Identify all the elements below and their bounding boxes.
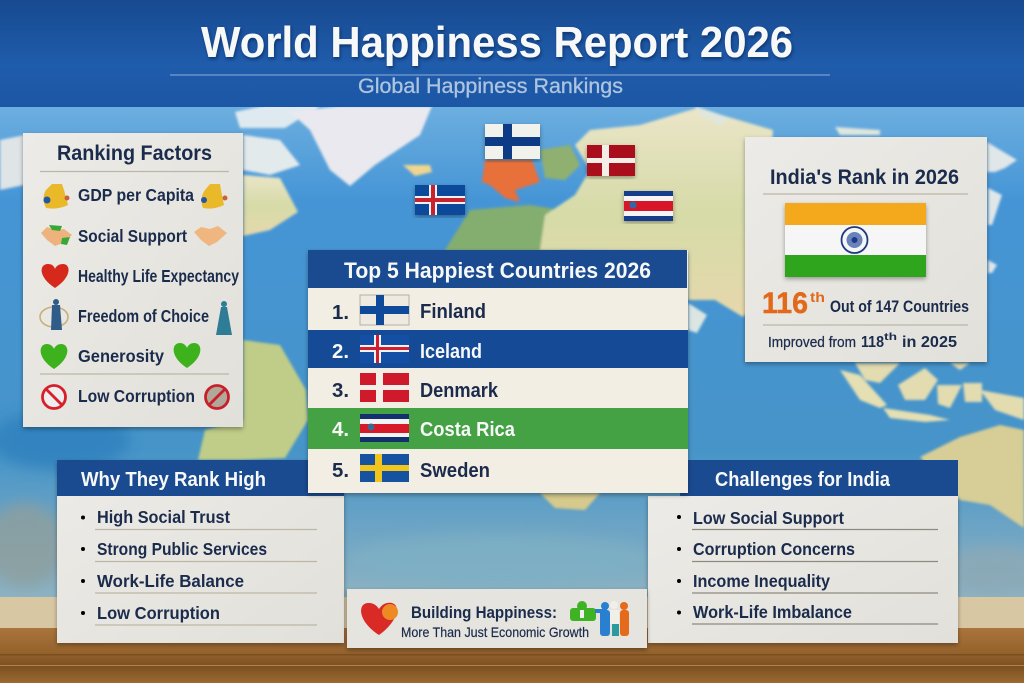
factor: GDP per Capita: GDP per Capita xyxy=(78,185,194,205)
panel: challenges for India xyxy=(648,460,958,643)
improvement note: Improved from xyxy=(768,334,856,351)
heading: challenges for India: Challenges for India xyxy=(715,469,891,491)
header band xyxy=(0,0,1024,107)
world map background xyxy=(0,100,1024,600)
callout text: Building Happiness: xyxy=(411,603,557,622)
heading: ranking factors: Ranking Factors xyxy=(57,142,212,165)
panel: why they rank high xyxy=(57,460,344,643)
list: challenges: Low Social Support xyxy=(693,508,844,528)
panel: India's rank xyxy=(745,137,987,362)
row 3: Denmark xyxy=(308,369,688,408)
row 4: Costa Rica: Costa Rica xyxy=(420,419,516,441)
row 5: Sweden: Sweden xyxy=(420,460,490,482)
row 1: Finland: Finland xyxy=(420,301,486,323)
map flag: Denmark xyxy=(587,145,635,176)
India flag xyxy=(785,203,926,277)
heading: why they rank high: Why They Rank High xyxy=(81,469,266,491)
icon: heart xyxy=(361,603,398,635)
panel: building happiness callout xyxy=(347,589,647,648)
factor: Generosity xyxy=(41,343,200,369)
list: challenges: Corruption Concerns xyxy=(693,539,855,559)
factor: Freedom of Choice xyxy=(40,299,232,335)
improvement note: 118 xyxy=(861,334,884,351)
India rank 116th xyxy=(762,287,969,320)
row 4: Costa Rica: 4. xyxy=(332,419,349,441)
title: World Happiness Report 2026 xyxy=(201,18,793,67)
row 2: Iceland: 2. xyxy=(332,341,349,363)
factor: GDP per Capita xyxy=(44,184,228,209)
list: challenges: Income Inequality xyxy=(693,571,830,591)
list: challenges xyxy=(677,508,938,624)
map flag: Costa Rica xyxy=(624,191,673,221)
factor: Freedom of Choice: Freedom of Choice xyxy=(78,306,209,326)
list: reasons: Work-Life Balance xyxy=(97,571,244,591)
factor: Low Corruption xyxy=(42,386,228,408)
improvement note: th xyxy=(884,332,897,343)
row 2: Iceland xyxy=(308,330,688,368)
callout text xyxy=(401,603,589,640)
row 1: Finland xyxy=(308,289,688,329)
row 1: Finland: 1. xyxy=(332,302,349,324)
panel: top 5 happiest countries xyxy=(308,250,688,493)
row 5: Sweden: 5. xyxy=(332,460,349,482)
factor: Social Support xyxy=(41,225,227,246)
India rank 116th: th xyxy=(810,289,825,305)
panel: ranking factors xyxy=(23,133,243,427)
factor: Generosity: Generosity xyxy=(78,346,164,366)
improvement note xyxy=(768,332,957,351)
subtitle: Global Happiness Rankings xyxy=(358,75,623,98)
factor: Healthy Life Expectancy: Healthy Life Expectancy xyxy=(78,266,239,286)
factor: Healthy Life Expectancy xyxy=(42,264,239,288)
heading: top 5: Top 5 Happiest Countries 2026 xyxy=(344,258,651,283)
list: reasons xyxy=(81,507,317,625)
list: challenges: Work-Life Imbalance xyxy=(693,602,852,622)
India rank 116th: 116 xyxy=(762,287,808,320)
India rank 116th: Out of 147 Countries xyxy=(830,297,969,316)
row 5: Sweden xyxy=(308,450,688,493)
table and wood ledge xyxy=(0,597,1024,683)
row 4: Costa Rica xyxy=(308,408,688,449)
callout text: More Than Just Economic Growth xyxy=(401,624,589,640)
heading: India's rank: India's Rank in 2026 xyxy=(770,166,959,189)
factor: Social Support: Social Support xyxy=(78,226,187,246)
list: reasons: Low Corruption xyxy=(97,603,220,623)
row 2: Iceland: Iceland xyxy=(420,341,482,363)
list: reasons: High Social Trust xyxy=(97,507,230,527)
row 3: Denmark: Denmark xyxy=(420,380,499,402)
improvement note: in 2025 xyxy=(902,334,957,351)
factor: Low Corruption: Low Corruption xyxy=(78,386,195,406)
map flag: Iceland xyxy=(415,185,465,215)
row 3: Denmark: 3. xyxy=(332,380,349,402)
icon: people xyxy=(570,601,629,636)
map flag: Finland xyxy=(485,124,540,159)
list: reasons: Strong Public Services xyxy=(97,539,267,559)
